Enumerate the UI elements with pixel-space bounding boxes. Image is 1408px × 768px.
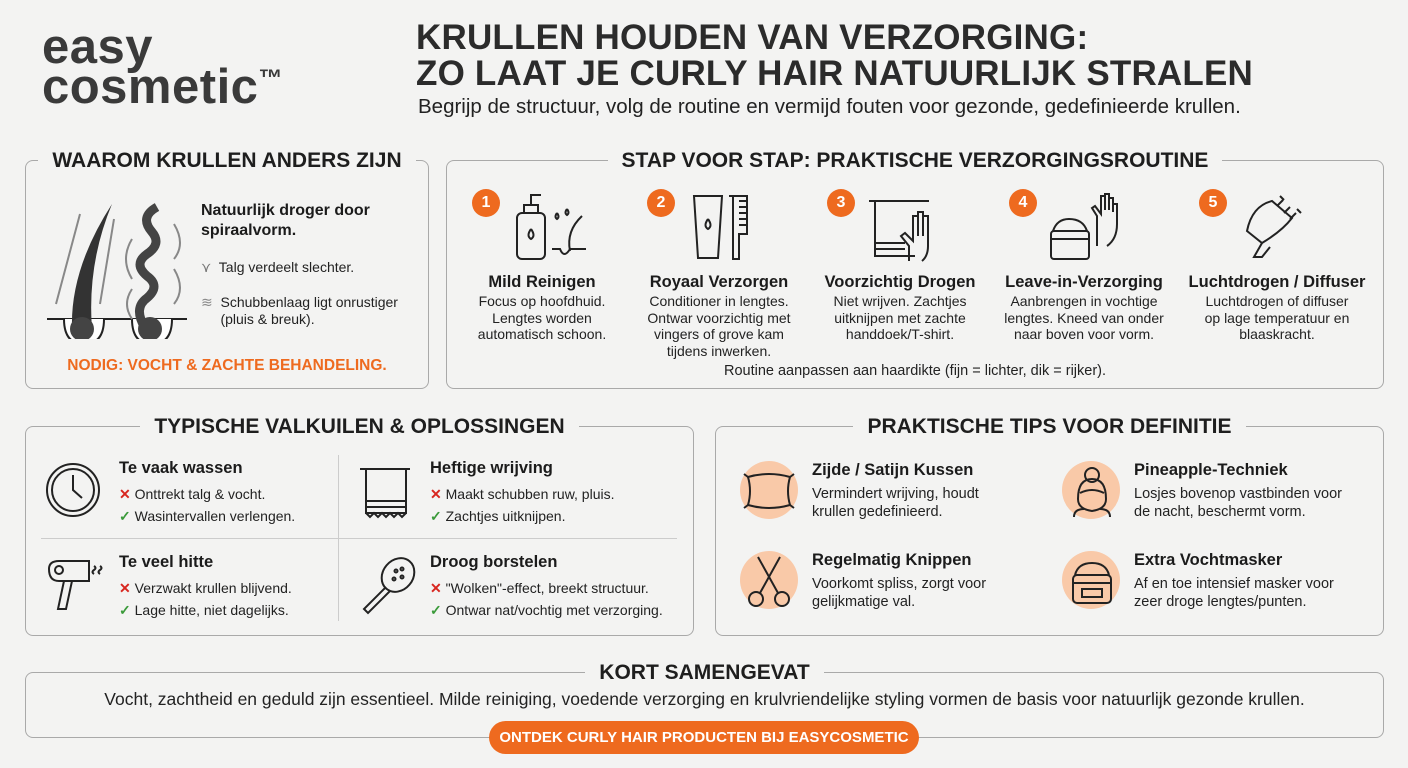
text: drier: Natuurlijk droger door <box>201 202 370 219</box>
item: te vaak wassen: Te vaak wassen <box>119 459 243 477</box>
item: te vaak wassen: ✕ Onttrekt talg & vocht. <box>119 486 265 502</box>
panel: tips: PRAKTISCHE TIPS VOOR DEFINITIE <box>867 415 1232 438</box>
tip: kussen: Zijde / Satijn Kussen <box>812 461 973 479</box>
step 2: Conditioner in lengtes. <box>649 293 789 309</box>
button <box>489 721 919 754</box>
item: heftige wrijving: ✕ Maakt schubben ruw, pluis. <box>430 486 614 502</box>
item: heftige wrijving: Heftige wrijving <box>430 459 553 477</box>
step 1: Mild Reinigen <box>488 273 596 291</box>
step 4: lengtes. Kneed van onder <box>1004 310 1164 326</box>
item: te veel hitte <box>48 553 292 618</box>
summary text: Vocht, zachtheid en geduld zijn essentieel. Milde reiniging, voedende verzorging en krulvriendelijke styling vormen de basis voor natuurlijk gezonde krullen. <box>104 689 1305 709</box>
step 2: 2 <box>657 194 665 211</box>
text: schubbenlaag: (pluis & breuk). <box>220 310 315 326</box>
panel: routine <box>446 160 1384 389</box>
step 5 <box>1189 189 1366 342</box>
logo <box>42 20 283 114</box>
panel: kort samengevat <box>25 672 1384 738</box>
step 4: Aanbrengen in vochtige <box>1010 293 1158 309</box>
item: droog borstelen: ✓ Ontwar nat/vochtig met verzorging. <box>430 602 663 618</box>
tip: vochtmasker: zeer droge lengtes/punten. <box>1134 594 1307 610</box>
item: te veel hitte: Te veel hitte <box>119 553 213 571</box>
tip: vochtmasker <box>1062 551 1334 610</box>
panel: routine: STAP VOOR STAP: PRAKTISCHE VERZORGINGSROUTINE <box>622 149 1208 172</box>
tip: pineapple: Losjes bovenop vastbinden voor <box>1134 486 1342 502</box>
tip: vochtmasker: Extra Vochtmasker <box>1134 551 1282 569</box>
panel: waarom krullen anders zijn <box>25 160 429 389</box>
tip: kussen <box>740 461 979 520</box>
step 2: Ontwar voorzichtig met <box>647 310 791 326</box>
step 2 <box>647 189 791 359</box>
icon: hair strands <box>47 203 187 339</box>
step 1: Lengtes worden <box>492 310 592 326</box>
logo: easy <box>42 20 153 74</box>
step 1 <box>472 189 606 342</box>
step 5: Luchtdrogen / Diffuser <box>1189 273 1365 291</box>
step 3: uitknijpen met zachte <box>834 310 966 326</box>
text: schubbenlaag: ≋ Schubbenlaag ligt onrustiger <box>201 294 398 310</box>
step 3 <box>824 189 975 342</box>
text: schubbenlaag <box>201 294 398 327</box>
step 1: 1 <box>482 194 490 211</box>
step 4: 4 <box>1019 194 1027 211</box>
note: Routine aanpassen aan haardikte (fijn = lichter, dik = rijker). <box>724 363 1106 379</box>
step 1: Focus op hoofdhuid. <box>479 293 605 309</box>
item: te vaak wassen: ✓ Wasintervallen verlengen. <box>119 508 295 524</box>
title: KRULLEN HOUDEN VAN VERZORGING: <box>416 18 1088 57</box>
step 4: Leave-in-Verzorging <box>1005 273 1163 291</box>
panel: kort samengevat: KORT SAMENGEVAT <box>599 661 810 684</box>
tip: knippen: gelijkmatige val. <box>812 594 915 610</box>
step 5: blaaskracht. <box>1239 326 1315 342</box>
step 4 <box>1004 189 1164 342</box>
subtitle: Begrijp de structuur, volg de routine en vermijd fouten voor gezonde, gedefinieerde krullen. <box>418 95 1241 118</box>
item: heftige wrijving <box>360 459 614 524</box>
step 3: Niet wrijven. Zachtjes <box>833 293 967 309</box>
tip: kussen: Vermindert wrijving, houdt <box>812 486 979 502</box>
step 1: automatisch schoon. <box>478 326 606 342</box>
button: ONTDEK CURLY HAIR PRODUCTEN BIJ EASYCOSMETIC <box>499 729 909 746</box>
tip: knippen <box>740 551 986 610</box>
item: droog borstelen <box>362 553 663 618</box>
panel: routine: tijdens inwerken. <box>667 342 771 358</box>
tip: vochtmasker: Af en toe intensief masker voor <box>1134 576 1334 592</box>
step 5: op lage temperatuur en <box>1205 310 1349 326</box>
title: ZO LAAT JE CURLY HAIR NATUURLIJK STRALEN <box>416 54 1253 93</box>
item: droog borstelen: Droog borstelen <box>430 553 557 571</box>
tip: kussen: krullen gedefinieerd. <box>812 504 943 520</box>
text: talg: ⋎ Talg verdeelt slechter. <box>201 259 354 275</box>
tip: knippen: Regelmatig Knippen <box>812 551 972 569</box>
callout: NODIG: VOCHT & ZACHTE BEHANDELING. <box>67 357 387 374</box>
tip: pineapple <box>1062 461 1342 520</box>
step 3: 3 <box>837 194 845 211</box>
panel: valkuilen: TYPISCHE VALKUILEN & OPLOSSINGEN <box>154 415 565 438</box>
step 3: Voorzichtig Drogen <box>825 273 975 291</box>
step 4: naar boven voor vorm. <box>1014 326 1154 342</box>
item: te veel hitte: ✓ Lage hitte, niet dagelijks. <box>119 602 289 618</box>
title <box>416 18 1253 93</box>
panel: tips <box>715 426 1384 636</box>
item: te vaak wassen <box>46 459 295 524</box>
item: te veel hitte: ✕ Verzwakt krullen blijvend. <box>119 580 292 596</box>
text: drier: spiraalvorm. <box>201 222 296 239</box>
tip: knippen: Voorkomt spliss, zorgt voor <box>812 576 986 592</box>
step 3: handdoek/T-shirt. <box>846 326 954 342</box>
tip: pineapple: de nacht, beschermt vorm. <box>1134 504 1306 520</box>
tip: pineapple: Pineapple-Techniek <box>1134 461 1288 479</box>
step 5: Luchtdrogen of diffuser <box>1206 293 1348 309</box>
panel: valkuilen <box>25 426 694 636</box>
text: drier <box>201 202 370 239</box>
step 5: 5 <box>1209 194 1217 211</box>
logo: cosmetic™ <box>42 60 283 114</box>
item: heftige wrijving: ✓ Zachtjes uitknijpen. <box>430 508 565 524</box>
step 2: vingers of grove kam <box>654 326 784 342</box>
item: droog borstelen: ✕ "Wolken"-effect, breekt structuur. <box>430 580 649 596</box>
panel: waarom krullen anders zijn: WAAROM KRULLEN ANDERS ZIJN <box>52 149 402 172</box>
step 2: Royaal Verzorgen <box>650 273 788 291</box>
